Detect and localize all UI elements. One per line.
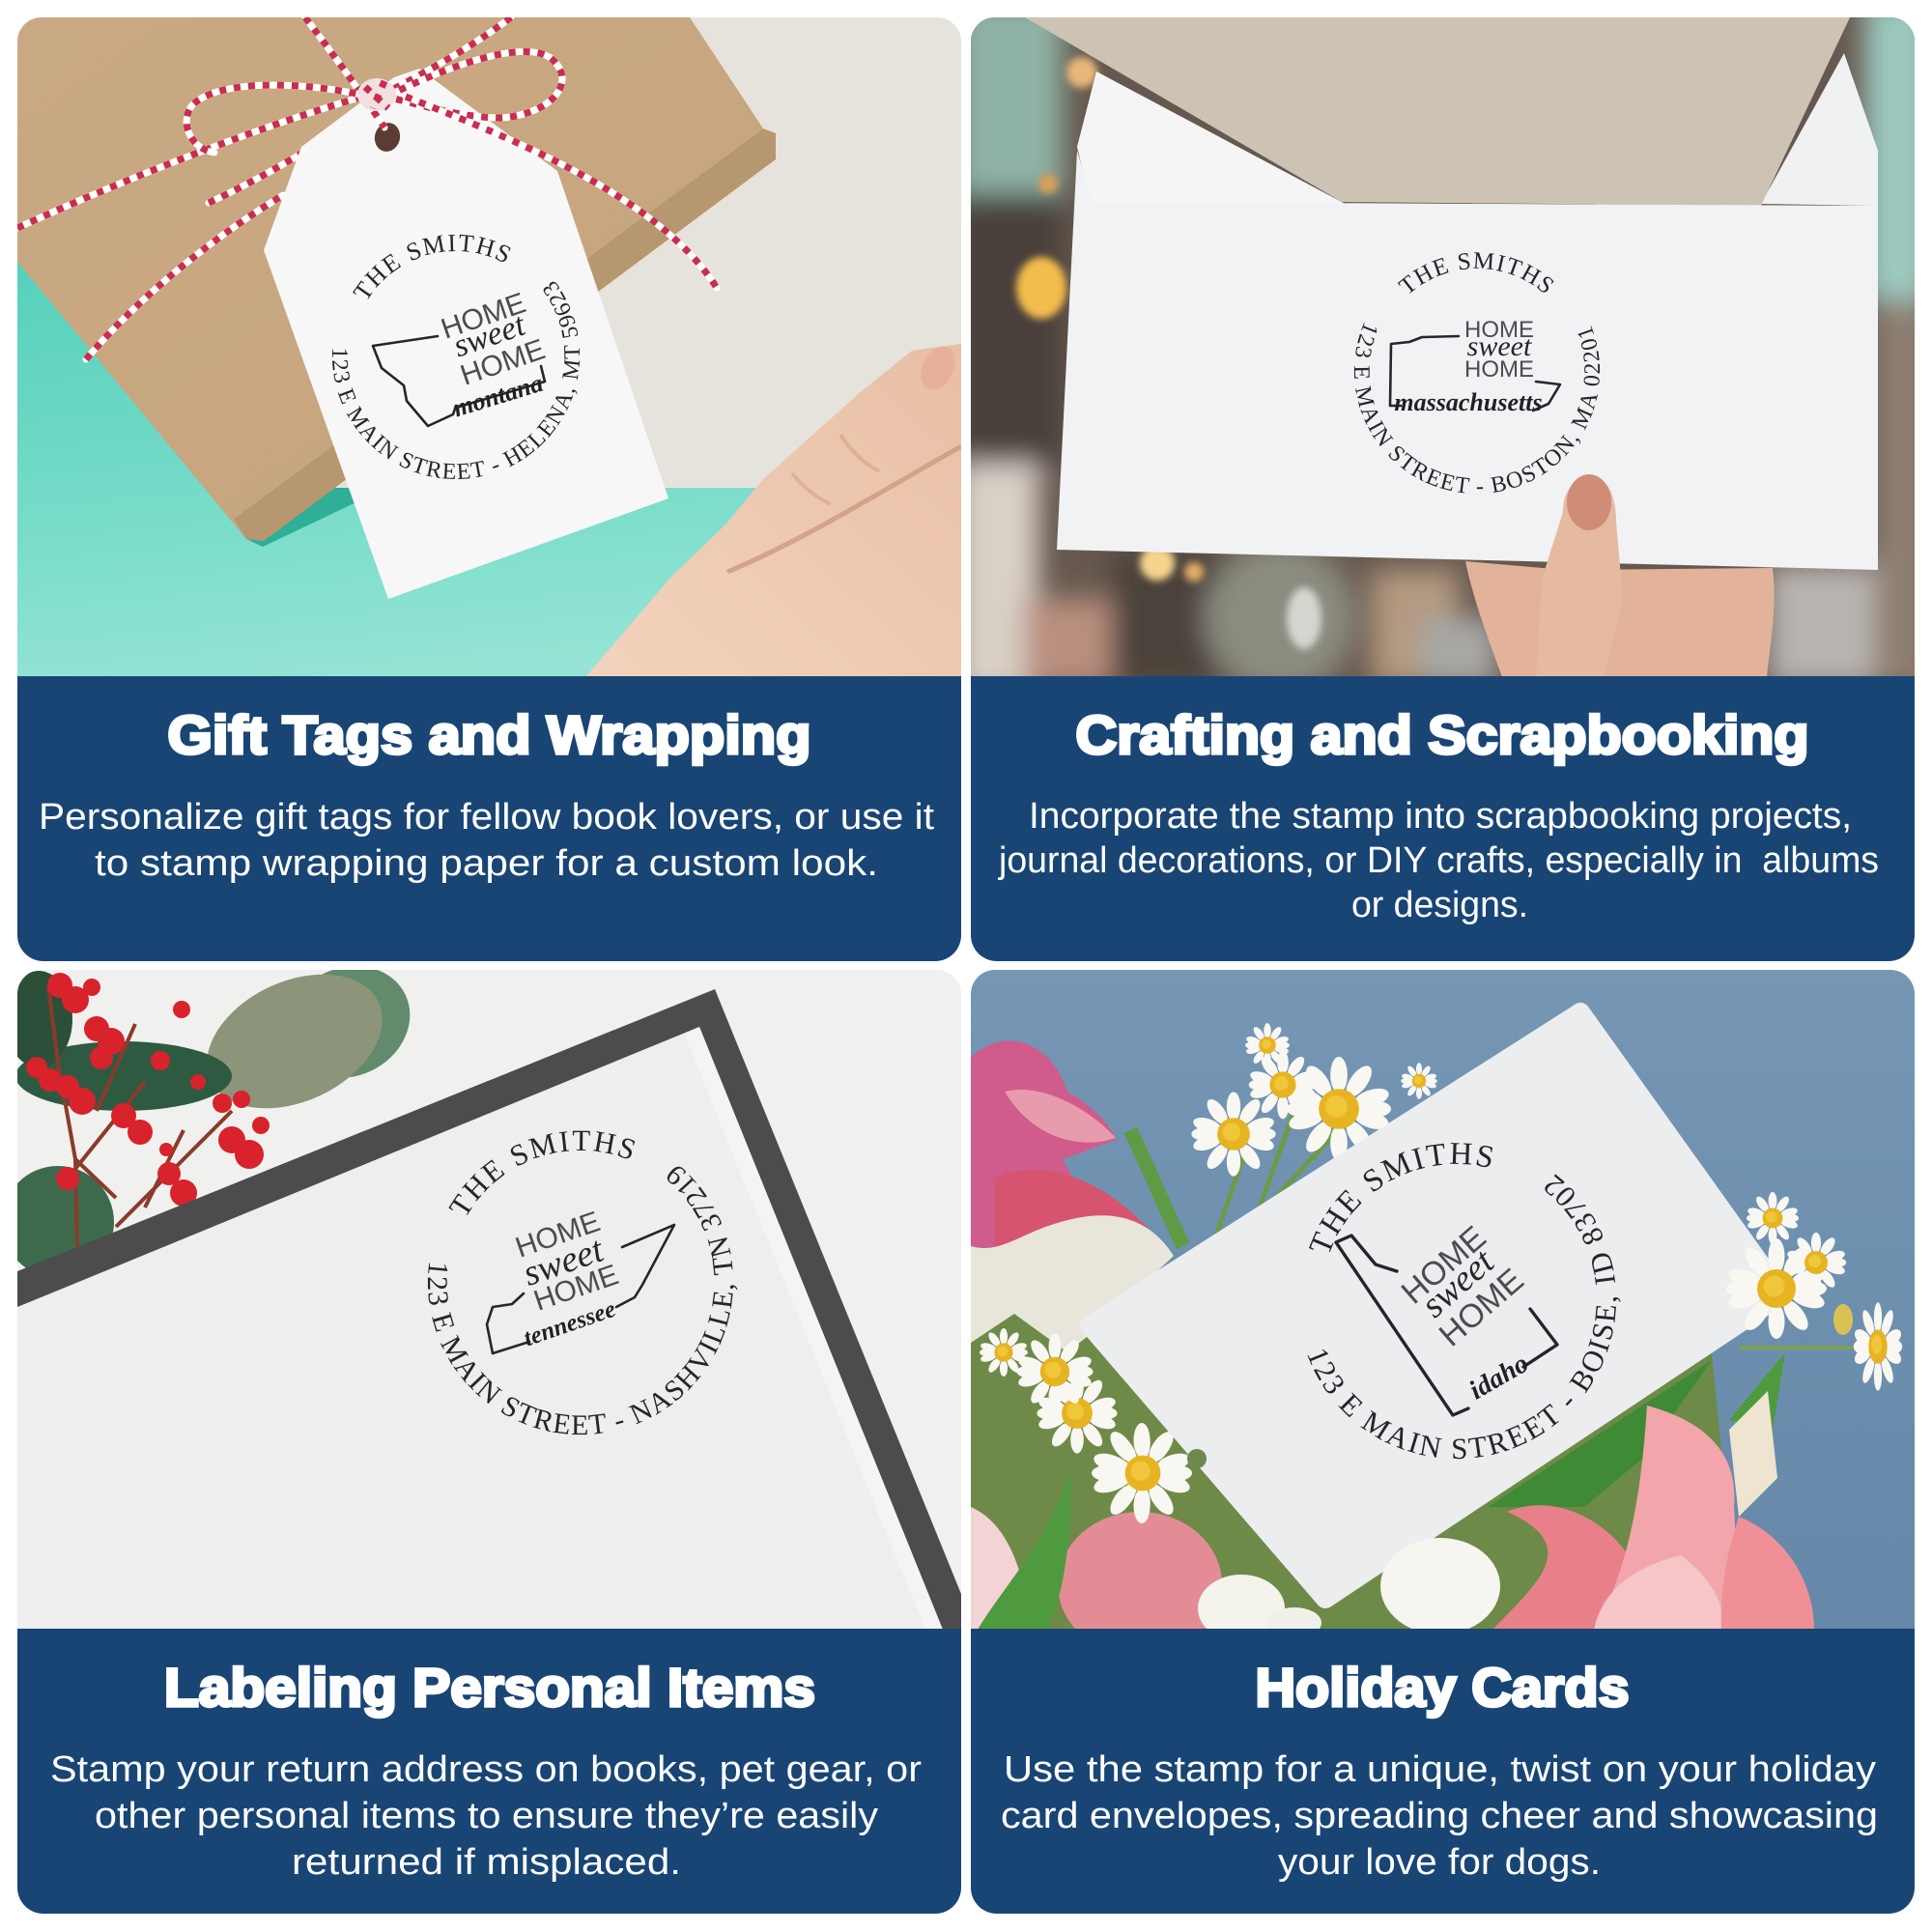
stamp: the smiths massachusetts: massachusetts: [1394, 388, 1543, 416]
daisies right of card: [1726, 1192, 1902, 1391]
panel: labeling personal items: [17, 970, 961, 1914]
stamp: the smiths idaho: HOME: [1395, 1219, 1493, 1312]
state outline: idaho: [1336, 1236, 1557, 1415]
body text: crafting: journal decorations, or DIY crafts, especially in albums: [998, 840, 1879, 881]
stamp: the smiths tennessee: HOME: [512, 1206, 604, 1264]
tag hole: [375, 123, 400, 152]
heading: holiday cards: Holiday Cards: [1256, 1657, 1629, 1718]
body text: gift tags: Personalize gift tags for fellow book lovers, or use it: [39, 797, 934, 838]
state outline: montana: [373, 336, 545, 426]
card hole: [1187, 1449, 1207, 1468]
daisies above and left of card: [980, 1023, 1437, 1523]
panel: crafting and scrapbooking: [971, 17, 1915, 961]
fingernail: [1567, 474, 1611, 530]
insert card: [1025, 17, 1850, 206]
stamp: the smiths massachusetts: HOME: [1464, 317, 1534, 343]
stamp: the smiths montana: 123 E MAIN STREET - HELENA, MT 59623: [332, 282, 580, 479]
hand holding envelope: [1465, 474, 1775, 677]
bokeh lights: [1016, 57, 1321, 649]
book page: [17, 1027, 943, 1630]
stamp: the smiths montana: montana: [450, 369, 546, 422]
panel: gift tags and wrapping: [17, 17, 961, 961]
stamp: the smiths idaho: THE SMITHS: [1309, 1143, 1493, 1252]
blurred background: [956, 0, 1932, 696]
envelope back and flaps: [1077, 71, 1352, 208]
body text: crafting: [998, 796, 1879, 925]
stamp: the smiths montana: sweet: [449, 306, 531, 364]
stamp: the smiths tennessee: sweet: [518, 1229, 610, 1294]
book cover band: [17, 989, 961, 1630]
kraft box: [17, 17, 776, 541]
caption bar: labeling: [17, 1629, 961, 1914]
photo: gift box with tag: [17, 17, 961, 676]
stamp: the smiths tennessee: tennessee: [521, 1296, 619, 1351]
stamp: the smiths tennessee: HOME: [530, 1259, 622, 1318]
stamp: the smiths massachusetts: THE SMITHS: [1397, 252, 1553, 294]
body text: labeling: returned if misplaced.: [292, 1842, 681, 1883]
panel: holiday cards: [971, 970, 1915, 1914]
envelope front: [1057, 151, 1878, 570]
body text: holiday: Use the stamp for a unique, twist on your holiday: [1004, 1749, 1876, 1790]
stamp: the smiths idaho: 123 E MAIN STREET - BOISE, ID 83702: [1308, 1175, 1621, 1459]
stamp: the smiths idaho: idaho: [1464, 1349, 1534, 1406]
body text: gift tags: [39, 797, 934, 884]
fingernail: [922, 346, 954, 390]
body text: holiday: [1001, 1749, 1878, 1883]
stamp: the smiths montana: HOME: [438, 287, 529, 346]
gift tag card: [264, 69, 668, 599]
alstroemeria, leaves and gypsophila: [1198, 1352, 1814, 1642]
body text: labeling: [50, 1749, 922, 1883]
photo: book with stamp: [17, 970, 961, 1629]
white card: [1090, 1012, 1782, 1599]
body text: gift tags: to stamp wrapping paper for a custom look.: [95, 843, 878, 884]
body text: labeling: Stamp your return address on books, pet gear, or: [50, 1749, 922, 1790]
stamp: the smiths tennessee: THE SMITHS: [448, 1130, 636, 1215]
daisy overlapping hole: [1096, 1427, 1189, 1520]
twine bow and knot: [186, 17, 717, 288]
pink and white flowers left: [971, 1040, 1222, 1657]
bouquet base foliage: [971, 1314, 1721, 1629]
stem and small buds right: [1739, 1304, 1855, 1350]
body text: holiday: your love for dogs.: [1278, 1842, 1601, 1883]
stamp: the smiths tennessee: 123 E MAIN STREET - NASHVILLE, TN 37219: [427, 1167, 738, 1435]
body text: crafting: or designs.: [1351, 885, 1528, 925]
stamp: the smiths idaho: HOME: [1433, 1262, 1531, 1354]
photo: card in bouquet: [971, 970, 1915, 1629]
state outline: massachusetts: [1390, 336, 1560, 411]
stamp: the smiths massachusetts: sweet: [1467, 330, 1532, 362]
caption bar: holiday: [971, 1629, 1915, 1914]
heading: gift tags and wrapping: Gift Tags and Wrapping: [168, 704, 811, 765]
photo: envelope in hand: [971, 17, 1915, 676]
caption bar: crafting: [971, 676, 1915, 961]
state outline: tennessee: [487, 1225, 674, 1353]
stamp: the smiths idaho: sweet: [1413, 1240, 1503, 1325]
twine strands behind tag: [17, 93, 376, 359]
hand: [585, 340, 962, 677]
body text: holiday: card envelopes, spreading cheer and showcasing: [1001, 1796, 1878, 1836]
stamp: the smiths montana: HOME: [457, 333, 549, 392]
heading: crafting and scrapbooking: Crafting and Scrapbooking: [1076, 704, 1808, 765]
stamp: the smiths montana: THE SMITHS: [353, 234, 511, 299]
heading: labeling personal items: Labeling Personal Items: [164, 1657, 815, 1718]
body text: crafting: Incorporate the stamp into scrapbooking projects,: [1029, 796, 1852, 837]
caption bar: gift tags: [17, 676, 961, 961]
stamp: the smiths massachusetts: [1354, 252, 1600, 493]
stamp: the smiths massachusetts: 123 E MAIN STREET - BOSTON, MA 02201: [1354, 323, 1600, 493]
stamp: the smiths massachusetts: HOME: [1464, 356, 1534, 383]
body text: labeling: other personal items to ensure they’re easily: [95, 1796, 878, 1836]
botanical sprig: [17, 970, 410, 1267]
